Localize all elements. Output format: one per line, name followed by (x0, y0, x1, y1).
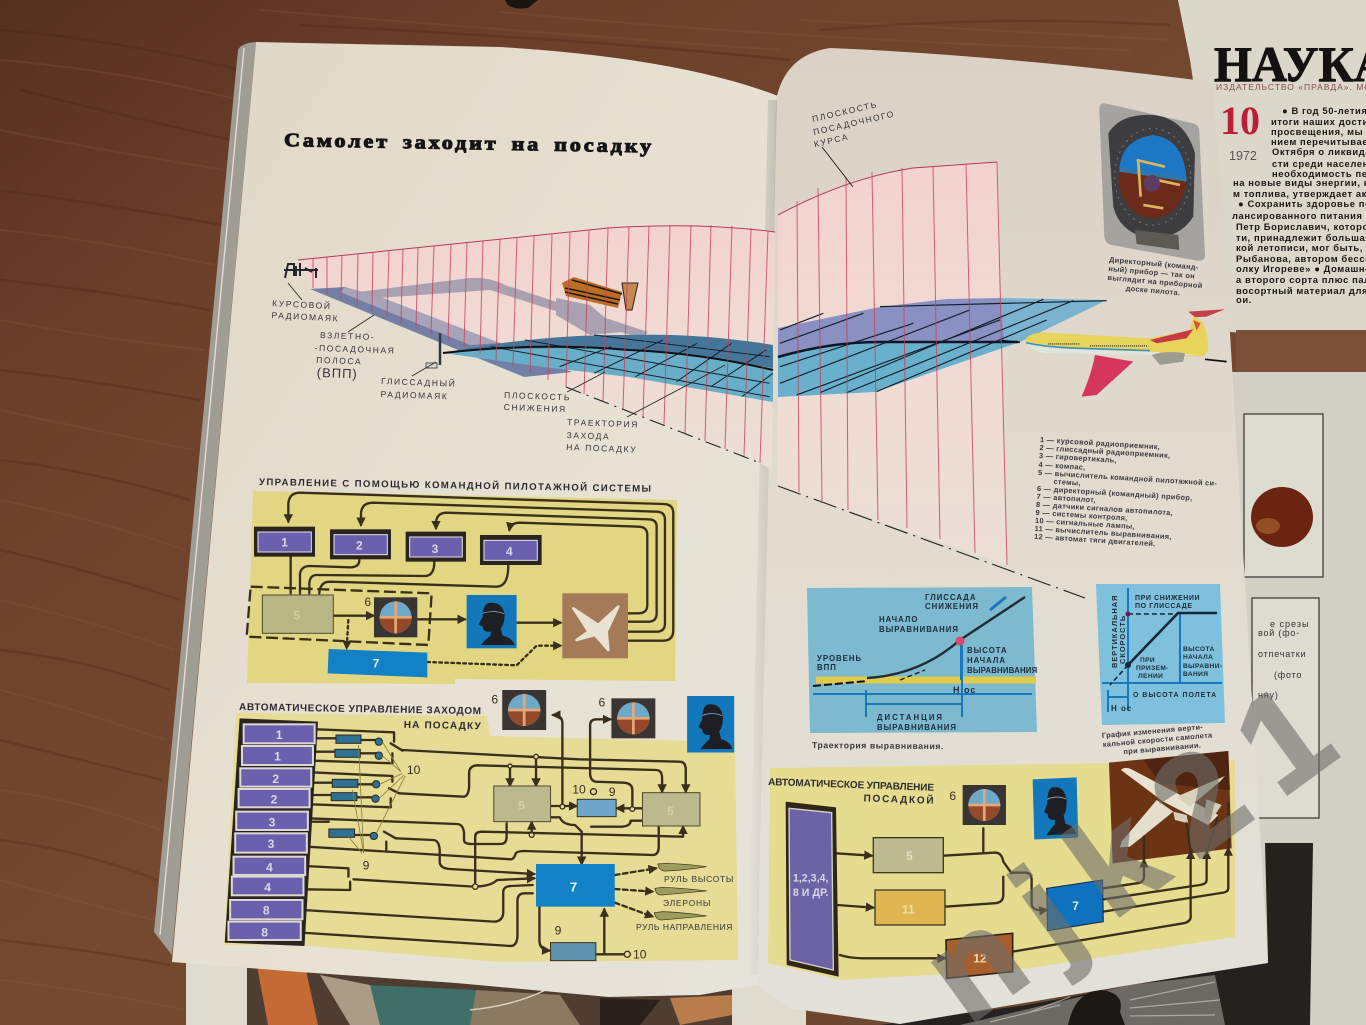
block 4: 4 (506, 545, 513, 559)
label: descent plane (504, 390, 571, 414)
legend: 12 — автомат тяги двигателей. (1034, 532, 1156, 548)
control surface: rudder (654, 912, 707, 920)
panel: command flight system (247, 491, 677, 684)
chart caption: vertical speed: при выравнивании. (1123, 740, 1201, 756)
callout numbers: 6 (599, 696, 606, 710)
label: approach path: ЗАХОДА (566, 430, 610, 442)
course beacon (284, 263, 318, 278)
callout numbers: 6 (491, 692, 498, 706)
axis labels: О ВЫСОТА ПОЛЕТА (1133, 692, 1217, 699)
chart labels: НАЧАЛА (967, 656, 1006, 665)
sensor list: 1 (274, 750, 281, 764)
heading: automatic landing (767, 777, 935, 807)
block 11 (875, 890, 945, 925)
callout numbers: 10 (572, 782, 586, 796)
chart caption: vertical speed: График изменения верти- (1102, 722, 1204, 740)
heading: command flight system: УПРАВЛЕНИЕ С ПОМОЩЬЮ КОМАНДНОЙ ПИЛОТАЖНОЙ СИСТЕМЫ (259, 476, 651, 495)
heading: automatic approach: НА ПОСАДКУ (404, 720, 482, 732)
chart labels: НАЧАЛО (879, 615, 918, 624)
block 7: 7 (1072, 899, 1079, 913)
illustration: approach scene right page (778, 96, 1227, 598)
callout numbers: 9 (555, 923, 562, 937)
caption frame: нну) (1258, 690, 1279, 700)
instrument caption: ный) прибор — так он (1108, 264, 1195, 281)
chart labels: ВЫРАВНИВАНИЯ (877, 723, 957, 732)
block 7 autopilot (536, 864, 615, 907)
label: runway: -ПОСАДОЧНАЯ (314, 343, 396, 356)
block 12: 12 (973, 952, 987, 966)
computers 5 (494, 786, 700, 826)
chart labels: ВПП (817, 663, 837, 672)
title: Самолет заходит на посадку (284, 130, 654, 157)
label: runway (314, 330, 396, 383)
caption frame: (фото (1274, 670, 1302, 680)
directive instrument photo (1099, 103, 1205, 261)
photo frame with round specimen (1244, 414, 1323, 577)
label: approach path (566, 417, 639, 454)
control surface: aileron (655, 887, 707, 895)
block 7 (1047, 880, 1103, 931)
label: descent plane: ПЛОСКОСТЬ (504, 390, 571, 402)
dashed frame (247, 587, 432, 645)
gutter shadow (748, 100, 777, 975)
block 11: 11 (902, 902, 915, 916)
axis labels: ПРИ (1140, 657, 1155, 664)
back magazine: page lower right (880, 330, 1366, 1025)
panel: automatic approach (224, 690, 738, 962)
legend: 9 — системы контроля, (1035, 508, 1128, 522)
axis labels: Н ос (1111, 704, 1132, 713)
axis labels: ПО ГЛИССАДЕ (1135, 603, 1193, 610)
axis labels: ПРИЗЕМ- (1136, 665, 1169, 672)
descent plane left (443, 335, 773, 402)
legend: стемы, (1053, 477, 1081, 488)
chart labels: ВЫРАВНИВАНИЯ (967, 666, 1038, 675)
dark feathered photo lower right (880, 843, 1313, 1025)
instrument caption: выглядит на приборной (1107, 273, 1203, 290)
computers 5: 5 (518, 798, 525, 812)
monitor 9 center (577, 799, 616, 817)
legend: 7 — автопилот, (1036, 492, 1096, 505)
legend: 1 — курсовой радиоприемник, (1040, 435, 1160, 451)
sensor list: 2 (271, 793, 278, 807)
axis labels: ПРИ СНИЖЕНИИ (1135, 595, 1200, 602)
heading: automatic approach: АВТОМАТИЧЕСКОЕ УПРАВЛЕНИЕ ЗАХОДОМ (239, 702, 481, 717)
wall lower dashed edge right (778, 486, 1085, 598)
sensor list (225, 718, 318, 946)
back magazine: cover top right (1178, 0, 1366, 342)
sensors block: 8 И ДР. (793, 887, 828, 899)
label 6: 6 (949, 789, 956, 803)
block 2: 2 (356, 538, 363, 552)
surface labels: ЭЛЕРОНЫ (663, 898, 712, 908)
chart: vertical speed (1096, 584, 1225, 725)
block 3 (406, 532, 466, 562)
panel: automatic landing (768, 751, 1235, 980)
sensor list: 8 (261, 925, 268, 939)
sensor list: 2 (272, 772, 279, 786)
caption frame: е срезы (1270, 619, 1309, 629)
chart: flare trajectory (807, 587, 1038, 733)
wiring (836, 803, 1228, 958)
legend: 6 — директорный (командный) прибор, (1037, 484, 1193, 502)
heading: automatic landing: АВТОМАТИЧЕСКОЕ УПРАВЛЕНИЕ (768, 777, 935, 794)
aircraft image (1109, 751, 1232, 863)
label: course plane: КУРСА (813, 131, 850, 149)
descent plane right (778, 298, 1107, 397)
label: course plane: ПОСАДОЧНОГО (812, 109, 896, 137)
block 3: 3 (432, 542, 439, 556)
chart caption: vertical speed: кальной скорости самолета (1102, 730, 1213, 749)
heading: automatic landing: ПОСАДКОЙ (863, 791, 934, 807)
callout numbers: 9 (609, 785, 616, 799)
block 7 autopilot: 7 (373, 657, 380, 671)
wall ribs left (313, 225, 768, 463)
label: course beacon (271, 297, 340, 324)
label: approach path: НА ПОСАДКУ (566, 442, 637, 454)
terminal building (562, 277, 638, 310)
instrument caption: Директорный (команд- (1109, 255, 1199, 272)
chart labels: СНИЖЕНИЯ (925, 602, 979, 611)
axis labels: СКОРОСТЬ (1118, 615, 1127, 664)
label: course plane (807, 96, 899, 149)
callout leaders (348, 742, 405, 853)
issue year: 1972 (1229, 149, 1257, 163)
legend (1034, 435, 1220, 552)
callout numbers (363, 692, 647, 962)
contents text: лансированного питания (1232, 210, 1363, 221)
runway (310, 278, 648, 377)
axis labels (1110, 595, 1222, 713)
pilot silhouette (467, 595, 517, 648)
legend: 2 — глиссадный радиоприемник, (1039, 443, 1171, 460)
axis labels: НАЧАЛА (1183, 654, 1213, 661)
legend: 8 — датчики сигналов автопилота, (1036, 500, 1173, 517)
block 4 (480, 535, 542, 565)
sensor list: 4 (266, 860, 273, 874)
wall top edge right (778, 162, 997, 215)
callout numbers: 9 (363, 858, 370, 872)
director instrument (374, 597, 417, 637)
director instrument (963, 785, 1006, 825)
block 7 autopilot: 7 (570, 879, 577, 894)
wall lower dashed edge (566, 387, 760, 463)
director instruments (502, 690, 655, 738)
right magazine page (757, 48, 1268, 1024)
nodes (472, 754, 635, 957)
block 2 (330, 529, 391, 559)
chart labels: ГЛИССАДА (925, 593, 976, 602)
chart labels: ДИСТАНЦИЯ (877, 713, 944, 722)
chart labels: Н ос (953, 685, 976, 695)
axis labels: ВЕРТИКАЛЬНАЯ (1110, 595, 1119, 668)
sensors block (786, 802, 839, 977)
block 12 (946, 933, 1013, 978)
sensor list: 8 (263, 904, 270, 918)
surface labels: РУЛЬ ВЫСОТЫ (664, 874, 735, 884)
wiring (301, 715, 686, 954)
chart labels: ВЫРАВНИВАНИЯ (879, 625, 959, 634)
leader: course plane (822, 147, 853, 187)
label: course plane: ПЛОСКОСТЬ (811, 99, 879, 124)
heading: automatic approach (239, 702, 482, 732)
left magazine page (172, 42, 778, 997)
axis labels: ВЫСОТА (1183, 646, 1215, 653)
label: runway: (ВПП) (317, 365, 358, 381)
instrument caption (1106, 255, 1205, 299)
illustration: approach scene left page (271, 225, 775, 470)
label: course beacon: РАДИОМАЯК (271, 310, 339, 324)
label: runway: ВЗЛЕТНО- (320, 330, 375, 342)
pilot silhouette (1033, 777, 1078, 840)
course plane wall right (778, 162, 1007, 565)
block 1: 1 (281, 536, 288, 550)
wall top edge (298, 226, 775, 260)
instrument caption: доске пилота. (1125, 284, 1181, 297)
back magazine: photo below (186, 960, 806, 1025)
sensor list: 1 (276, 728, 283, 742)
block 5 computer (262, 595, 333, 633)
chart labels: УРОВЕНЬ (817, 654, 862, 663)
label: descent plane: СНИЖЕНИЯ (504, 402, 567, 414)
sensors block: 1,2,3,4, (793, 873, 828, 885)
pilot silhouette (687, 696, 734, 753)
page edge stack (154, 42, 256, 955)
legend: 4 — компас, (1038, 460, 1086, 472)
label: course beacon: КУРСОВОЙ (272, 297, 332, 311)
axis labels: ВАНИЯ (1183, 671, 1208, 678)
caption frame: вой (фо- (1258, 628, 1300, 638)
label: glide beacon (380, 375, 457, 402)
wall ribs right (797, 162, 1007, 565)
course plane wall left (298, 225, 775, 470)
aircraft block (562, 593, 628, 658)
chart labels (817, 593, 1038, 732)
label: runway: ПОЛОСА (316, 355, 362, 366)
monitors 9 and lamps 10 (329, 735, 383, 840)
callout numbers: 10 (633, 948, 647, 962)
chart caption: flare trajectory: Траектория выравнивания. (812, 740, 944, 751)
contents text (1232, 105, 1366, 305)
jet aircraft (1002, 309, 1227, 397)
wiring (288, 493, 673, 665)
glide beacon (426, 333, 440, 368)
legend: 5 — вычислитель командной пилотажной си- (1038, 468, 1218, 488)
surface labels: РУЛЬ НАПРАВЛЕНИЯ (636, 922, 734, 932)
legend: 11 — вычислитель выравнивания, (1034, 524, 1172, 541)
control surface: elevator (658, 863, 707, 871)
block 7 autopilot (328, 649, 427, 677)
callout numbers: 10 (407, 763, 421, 777)
sensor list: 3 (269, 815, 276, 829)
monitor 9 bottom (551, 943, 596, 961)
sensor list: 4 (264, 880, 271, 894)
chart caption: vertical speed (1102, 721, 1214, 758)
block 1 (254, 527, 315, 557)
label: glide beacon: РАДИОМАЯК (380, 389, 449, 401)
contents text: ● В год 50-летия (1282, 105, 1366, 116)
legend: 10 — сигнальные лампы, (1035, 516, 1135, 531)
computers 5: 5 (667, 804, 674, 818)
chart labels: ВЫСОТА (967, 646, 1008, 655)
label 6: 6 (364, 595, 371, 609)
surface labels (636, 874, 735, 932)
legend: 3 — гировертикаль, (1039, 451, 1117, 465)
label: approach path: ТРАЕКТОРИЯ (567, 417, 639, 430)
caption frame: отпечатки (1258, 649, 1306, 659)
issue number: 10 (1220, 98, 1260, 143)
axis labels: ЛЕНИИ (1138, 673, 1163, 680)
block 5 computer: 5 (293, 608, 300, 622)
sensor list: 3 (268, 837, 275, 851)
block 5: 5 (906, 849, 913, 863)
block 5 (873, 838, 943, 873)
caption frame (1252, 598, 1319, 818)
leader lines (288, 283, 725, 417)
label: glide beacon: ГЛИССАДНЫЙ (381, 375, 457, 389)
contents text: ои. (1236, 294, 1252, 305)
axis labels: ВЫРАВНИ- (1183, 663, 1222, 670)
